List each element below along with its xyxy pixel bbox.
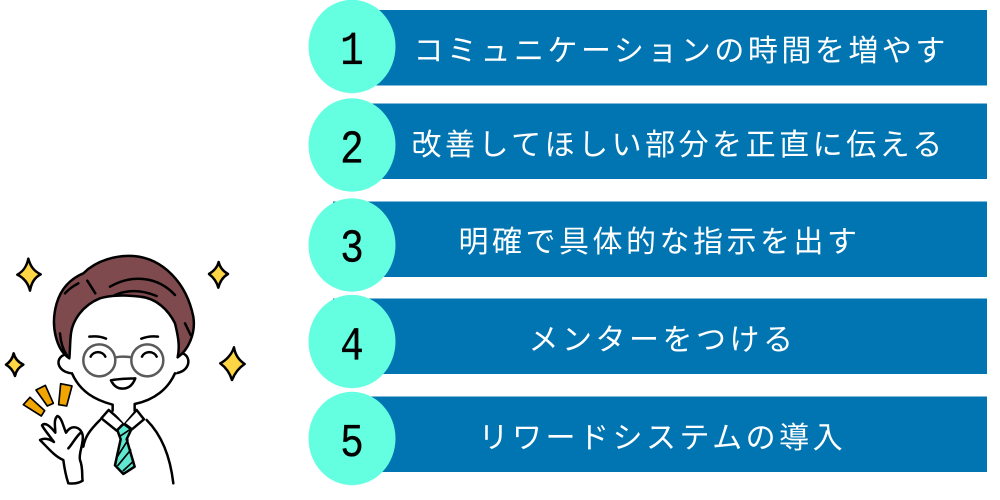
- number badge 5: [308, 392, 396, 485]
- number badge 1: [308, 0, 396, 93]
- bar 5: [333, 396, 987, 472]
- bar 1: [333, 10, 987, 86]
- item 4: [308, 295, 987, 388]
- icon: necktie: [115, 424, 135, 474]
- eyes: [91, 352, 157, 357]
- item 3: [308, 198, 987, 292]
- number 3: 3: [340, 224, 364, 277]
- number 2: 2: [340, 125, 364, 178]
- label 4: メンターをつける: [528, 324, 796, 357]
- bar 3: [333, 202, 987, 277]
- item 5: [308, 392, 987, 485]
- number 1: 1: [340, 26, 364, 79]
- ears: [58, 355, 72, 373]
- number 5: 5: [340, 418, 364, 471]
- glasses: [83, 344, 163, 376]
- bar 2: [333, 104, 987, 179]
- mouth: [111, 378, 135, 389]
- number badge 2: [308, 98, 396, 192]
- icon: sparkles: [6, 259, 245, 380]
- face: [71, 296, 178, 423]
- collar: [101, 410, 144, 431]
- number 4: 4: [340, 322, 364, 375]
- icon: emphasis marks: [23, 384, 72, 416]
- label 1: コミュニケーションの時間を増やす: [414, 35, 949, 68]
- item 1: [308, 0, 987, 93]
- item 2: [308, 98, 987, 192]
- label 3: 明確で具体的な指示を出す: [458, 226, 860, 259]
- label 5: リワードシステムの導入: [478, 422, 846, 455]
- body: [83, 420, 100, 447]
- illustration: smiling man making OK sign: [6, 256, 245, 484]
- hair: [54, 256, 194, 358]
- number badge 4: [308, 295, 396, 388]
- label 2: 改善してほしい部分を正直に伝える: [412, 129, 946, 162]
- number badge 3: [308, 198, 396, 292]
- bar 4: [333, 298, 987, 374]
- hand: [40, 416, 83, 484]
- eyebrows: [89, 336, 158, 339]
